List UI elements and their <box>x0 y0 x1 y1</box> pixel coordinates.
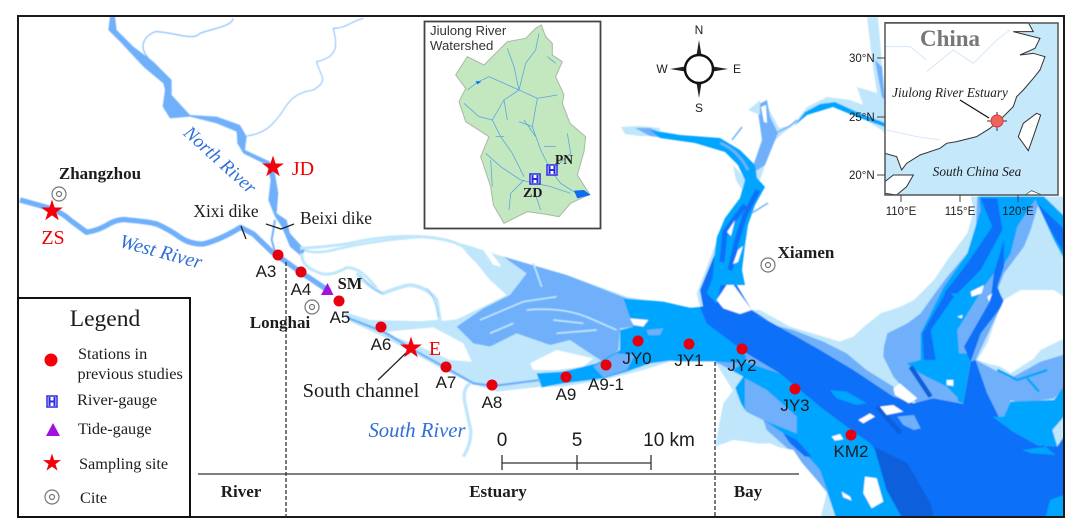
station labels: KM2 <box>834 442 868 461</box>
city markers <box>52 187 775 314</box>
station labels: A8 <box>482 393 502 412</box>
river and place labels: Beixi dike <box>300 208 372 228</box>
scale bar <box>497 430 695 470</box>
leader line <box>960 100 989 118</box>
north strait and upper channels <box>621 17 885 285</box>
river and place labels <box>41 122 835 442</box>
legend <box>18 298 190 517</box>
North River <box>108 17 363 257</box>
inset: Jiulong River Watershed <box>424 22 600 228</box>
stations <box>272 250 856 440</box>
river and place labels: ZS <box>41 227 65 249</box>
latitude and longitude ticks: 115°E <box>945 206 976 218</box>
region labels: River <box>221 482 262 501</box>
river and place labels: JD <box>292 158 314 180</box>
sampling stars <box>41 156 422 357</box>
compass: N <box>695 23 703 37</box>
latitude and longitude ticks: 120°E <box>1002 206 1034 218</box>
inset title: Jiulong River <box>430 23 507 38</box>
river and place labels: Xiamen <box>778 243 835 262</box>
West River <box>20 200 420 292</box>
right-hand shoal <box>976 353 1068 420</box>
legend: tide gauge: Tide-gauge <box>78 419 152 438</box>
station labels: A9 <box>556 385 576 404</box>
river and place labels: Longhai <box>250 313 311 332</box>
inset: China <box>849 23 1058 218</box>
legend: stations <box>44 344 183 383</box>
latitude and longitude ticks: 25°N <box>849 112 875 124</box>
scale bar: 0 <box>497 430 507 451</box>
legend: cite <box>45 488 107 507</box>
region labels <box>221 482 763 501</box>
station labels: A7 <box>436 373 456 392</box>
region labels: Estuary <box>469 482 527 501</box>
gauge PN <box>547 165 557 175</box>
land <box>885 23 1045 195</box>
region labels: Bay <box>734 482 763 501</box>
station labels: A6 <box>371 335 391 354</box>
river and place labels: Xixi dike <box>193 201 259 221</box>
watershed shape with streams <box>456 25 591 223</box>
bay <box>667 197 1068 520</box>
label PN: PN <box>555 152 573 167</box>
station labels: A3 <box>256 262 276 281</box>
location marker <box>987 112 1007 131</box>
station labels: JY2 <box>727 356 757 375</box>
estuary fan <box>300 236 720 457</box>
sea label: South China Sea <box>933 164 1022 179</box>
river and place labels: SM <box>338 274 363 293</box>
river and place labels: North River <box>178 122 261 199</box>
compass <box>656 23 741 115</box>
legend title: Legend <box>70 306 140 332</box>
compass: W <box>656 62 668 76</box>
latitude and longitude ticks: 30°N <box>849 53 875 65</box>
river and place labels: Zhangzhou <box>59 164 141 183</box>
station labels: A5 <box>330 308 350 327</box>
river and place labels: E <box>429 338 441 360</box>
river and place labels: South channel <box>303 380 420 402</box>
compass: E <box>733 62 741 76</box>
label ZD: ZD <box>523 186 542 201</box>
compass: S <box>695 101 703 115</box>
river and place labels: South River <box>368 420 466 442</box>
legend: stations: previous studies <box>78 364 183 383</box>
station labels: JY0 <box>622 349 652 368</box>
legend: sampling site <box>43 454 168 473</box>
legend: stations: Stations in <box>78 344 147 363</box>
estuary label: Jiulong River Estuary <box>892 85 1008 100</box>
latitude and longitude ticks: 20°N <box>849 170 875 182</box>
station labels: A9-1 <box>588 375 624 394</box>
dike ticks and leader <box>241 224 406 380</box>
river and place labels: West River <box>117 230 205 274</box>
scale bar: 5 <box>572 430 582 451</box>
legend: river gauge: River-gauge <box>77 390 157 409</box>
station labels: A4 <box>291 280 311 299</box>
latitude and longitude ticks: 110°E <box>886 206 917 218</box>
station labels <box>256 262 868 461</box>
gauge ZD <box>530 174 540 184</box>
legend: tide gauge <box>46 419 152 438</box>
station labels: JY1 <box>674 351 704 370</box>
scale bar: 10 km <box>643 430 695 451</box>
region dividers <box>198 262 799 517</box>
tide gauge SM <box>321 283 334 295</box>
inset title line 2: Watershed <box>430 38 493 53</box>
legend: sampling site: Sampling site <box>79 454 168 473</box>
legend: cite: Cite <box>80 488 107 507</box>
station labels: JY3 <box>780 396 810 415</box>
China label: China <box>920 26 981 51</box>
latitude and longitude ticks <box>849 53 1034 218</box>
